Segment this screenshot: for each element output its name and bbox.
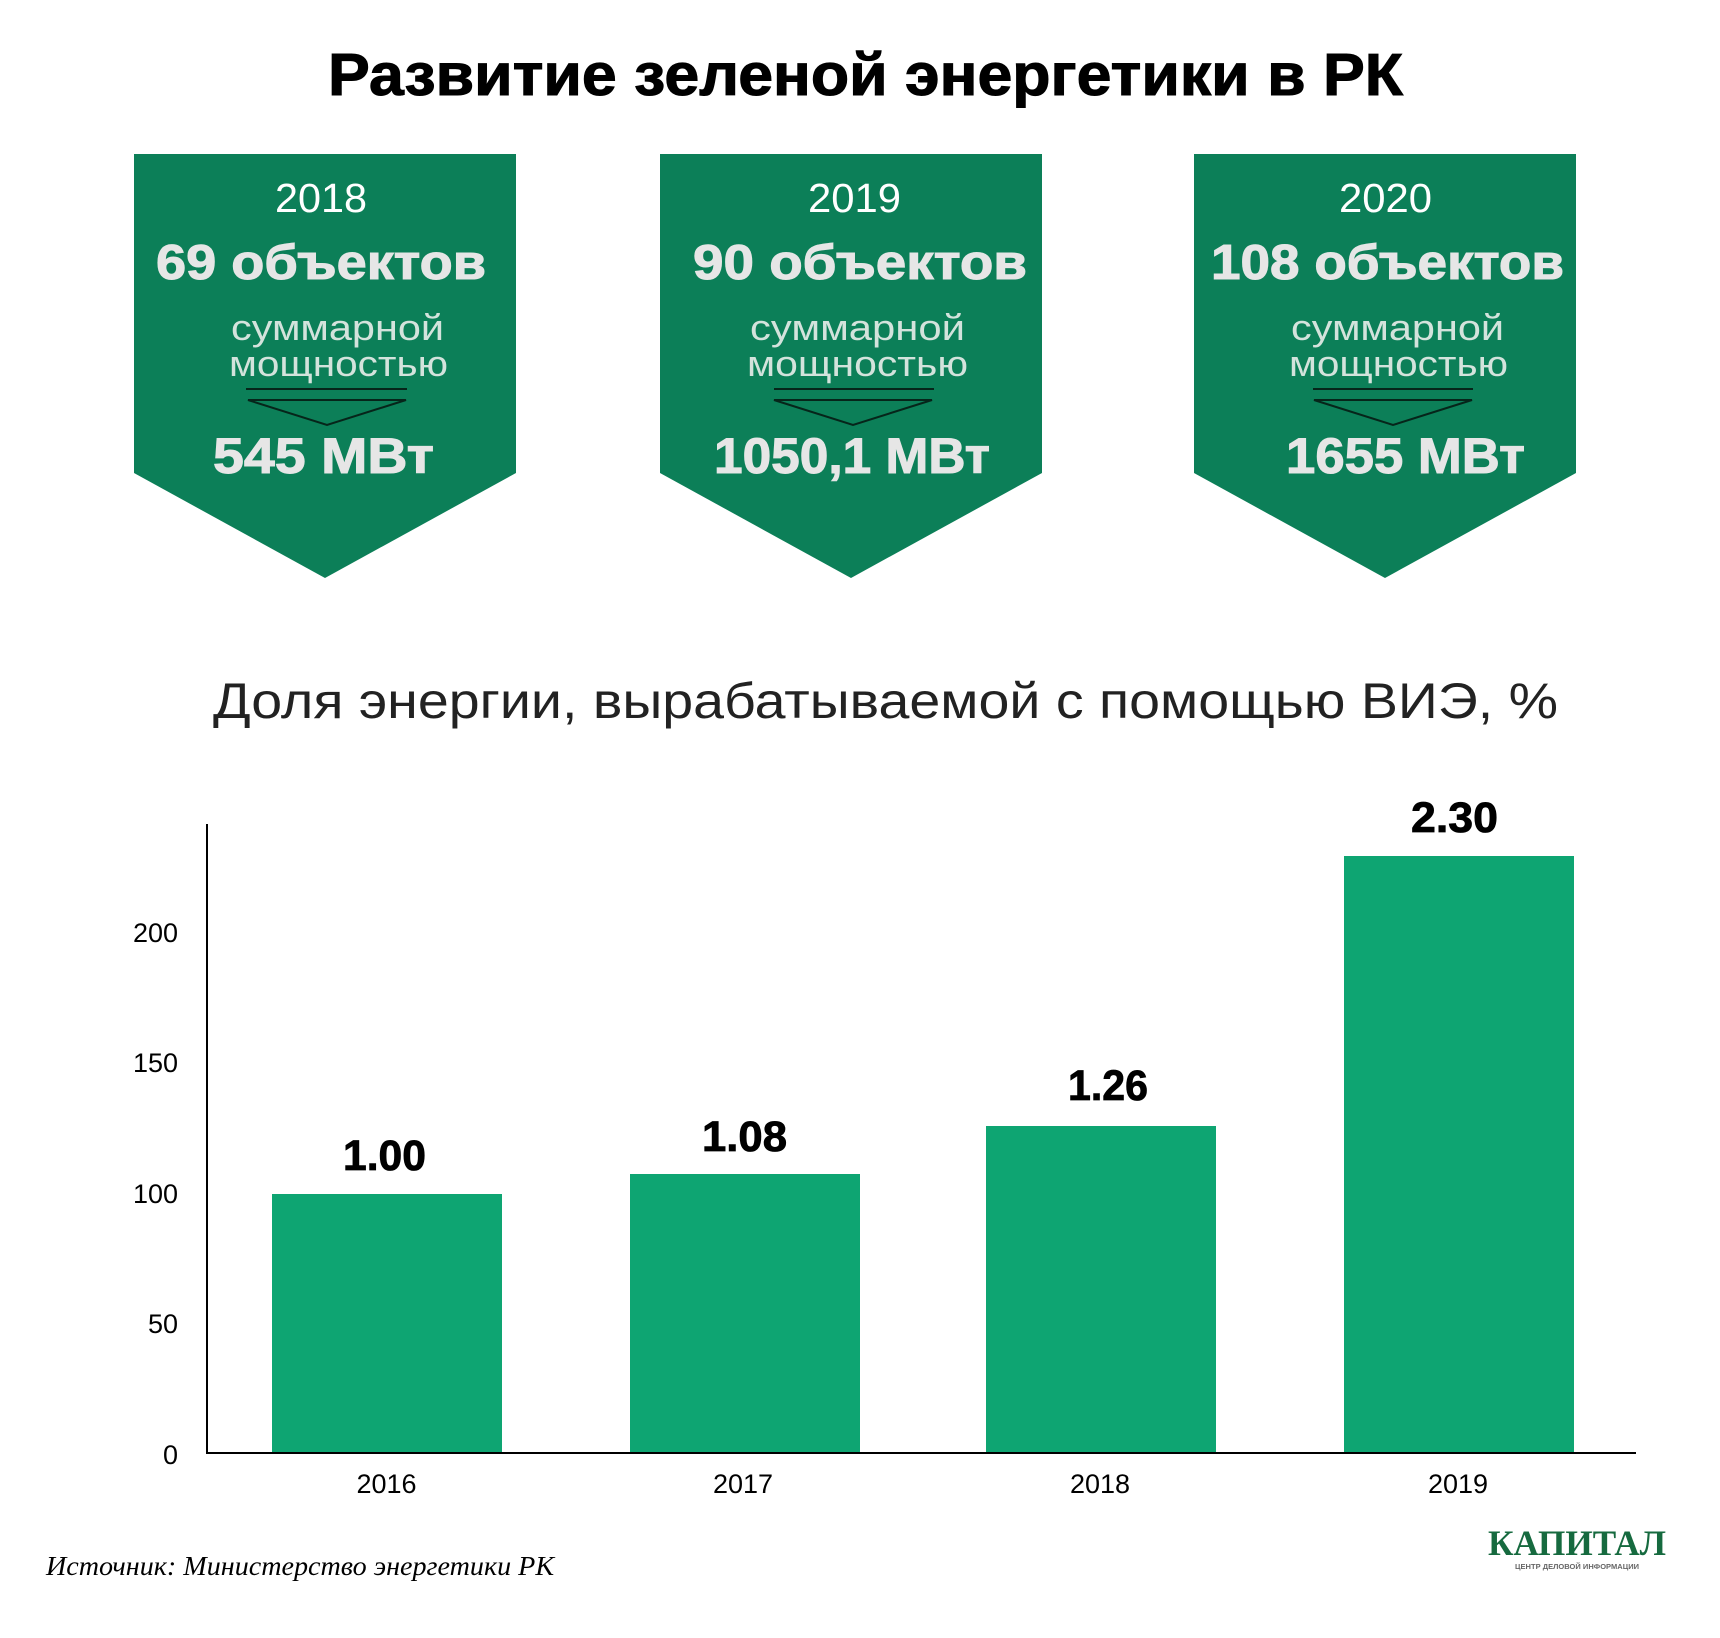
value labels: 1.00 xyxy=(343,1132,426,1180)
bars xyxy=(272,856,1574,1453)
title: Развитие зеленой энергетики в РК xyxy=(328,42,1404,108)
logo: Kapital: КАПИТАЛ xyxy=(1488,1523,1666,1563)
panel: 2020 shield: суммарной xyxy=(1291,307,1504,348)
panel: 2018 shield: суммарной xyxy=(231,307,444,348)
panel: 2020 shield xyxy=(1194,154,1576,578)
panel: 2020 shield: мощностью xyxy=(1289,343,1508,384)
icon: arrow down xyxy=(774,389,934,425)
value labels: 1.26 xyxy=(1068,1062,1148,1110)
icon: arrow down xyxy=(246,389,407,425)
panel: 2020 shield: 1655 МВт xyxy=(1286,428,1525,484)
value labels xyxy=(343,794,1498,1180)
value labels: 2.30 xyxy=(1411,794,1498,842)
y axis labels: 0 xyxy=(163,1440,178,1470)
bar chart xyxy=(133,794,1636,1499)
panel: 2018 shield: 545 МВт xyxy=(213,428,434,484)
chart heading: Доля энергии, вырабатываемой с помощью ВИЭ, % xyxy=(213,673,1558,729)
panel: 2019 shield: 2019 xyxy=(808,175,901,221)
panel: 2020 shield: 108 объектов xyxy=(1211,236,1564,290)
x axis labels xyxy=(356,1469,1488,1499)
panel: 2020 shield: 2020 xyxy=(1339,175,1432,221)
x axis labels: 2016 xyxy=(356,1469,417,1499)
y axis labels: 200 xyxy=(133,918,178,948)
logo: Kapital: ЦЕНТР ДЕЛОВОЙ ИНФОРМАЦИИ xyxy=(1515,1562,1639,1571)
source note: Источник: Министерство энергетики РК xyxy=(45,1551,556,1581)
value labels: 1.08 xyxy=(702,1113,787,1161)
y axis labels: 50 xyxy=(148,1309,178,1339)
panel: 2018 shield: мощностью xyxy=(229,343,448,384)
panel: 2019 shield: 1050,1 МВт xyxy=(714,428,990,484)
icon: arrow down xyxy=(1313,389,1473,425)
y axis labels xyxy=(133,918,178,1470)
y axis labels: 100 xyxy=(133,1179,178,1209)
axes xyxy=(207,824,1636,1454)
panel: 2019 shield: 90 объектов xyxy=(693,236,1027,290)
panel: 2019 shield xyxy=(660,154,1042,578)
x axis labels: 2019 xyxy=(1428,1469,1488,1499)
panel: 2019 shield: мощностью xyxy=(747,343,968,384)
panel: 2019 shield: суммарной xyxy=(750,307,965,348)
x axis labels: 2017 xyxy=(713,1469,773,1499)
panel: 2018 shield xyxy=(134,154,516,578)
panel: 2018 shield: 69 объектов xyxy=(156,236,486,290)
panel: 2018 shield: 2018 xyxy=(275,175,367,221)
x axis labels: 2018 xyxy=(1070,1469,1130,1499)
y axis labels: 150 xyxy=(133,1048,178,1078)
